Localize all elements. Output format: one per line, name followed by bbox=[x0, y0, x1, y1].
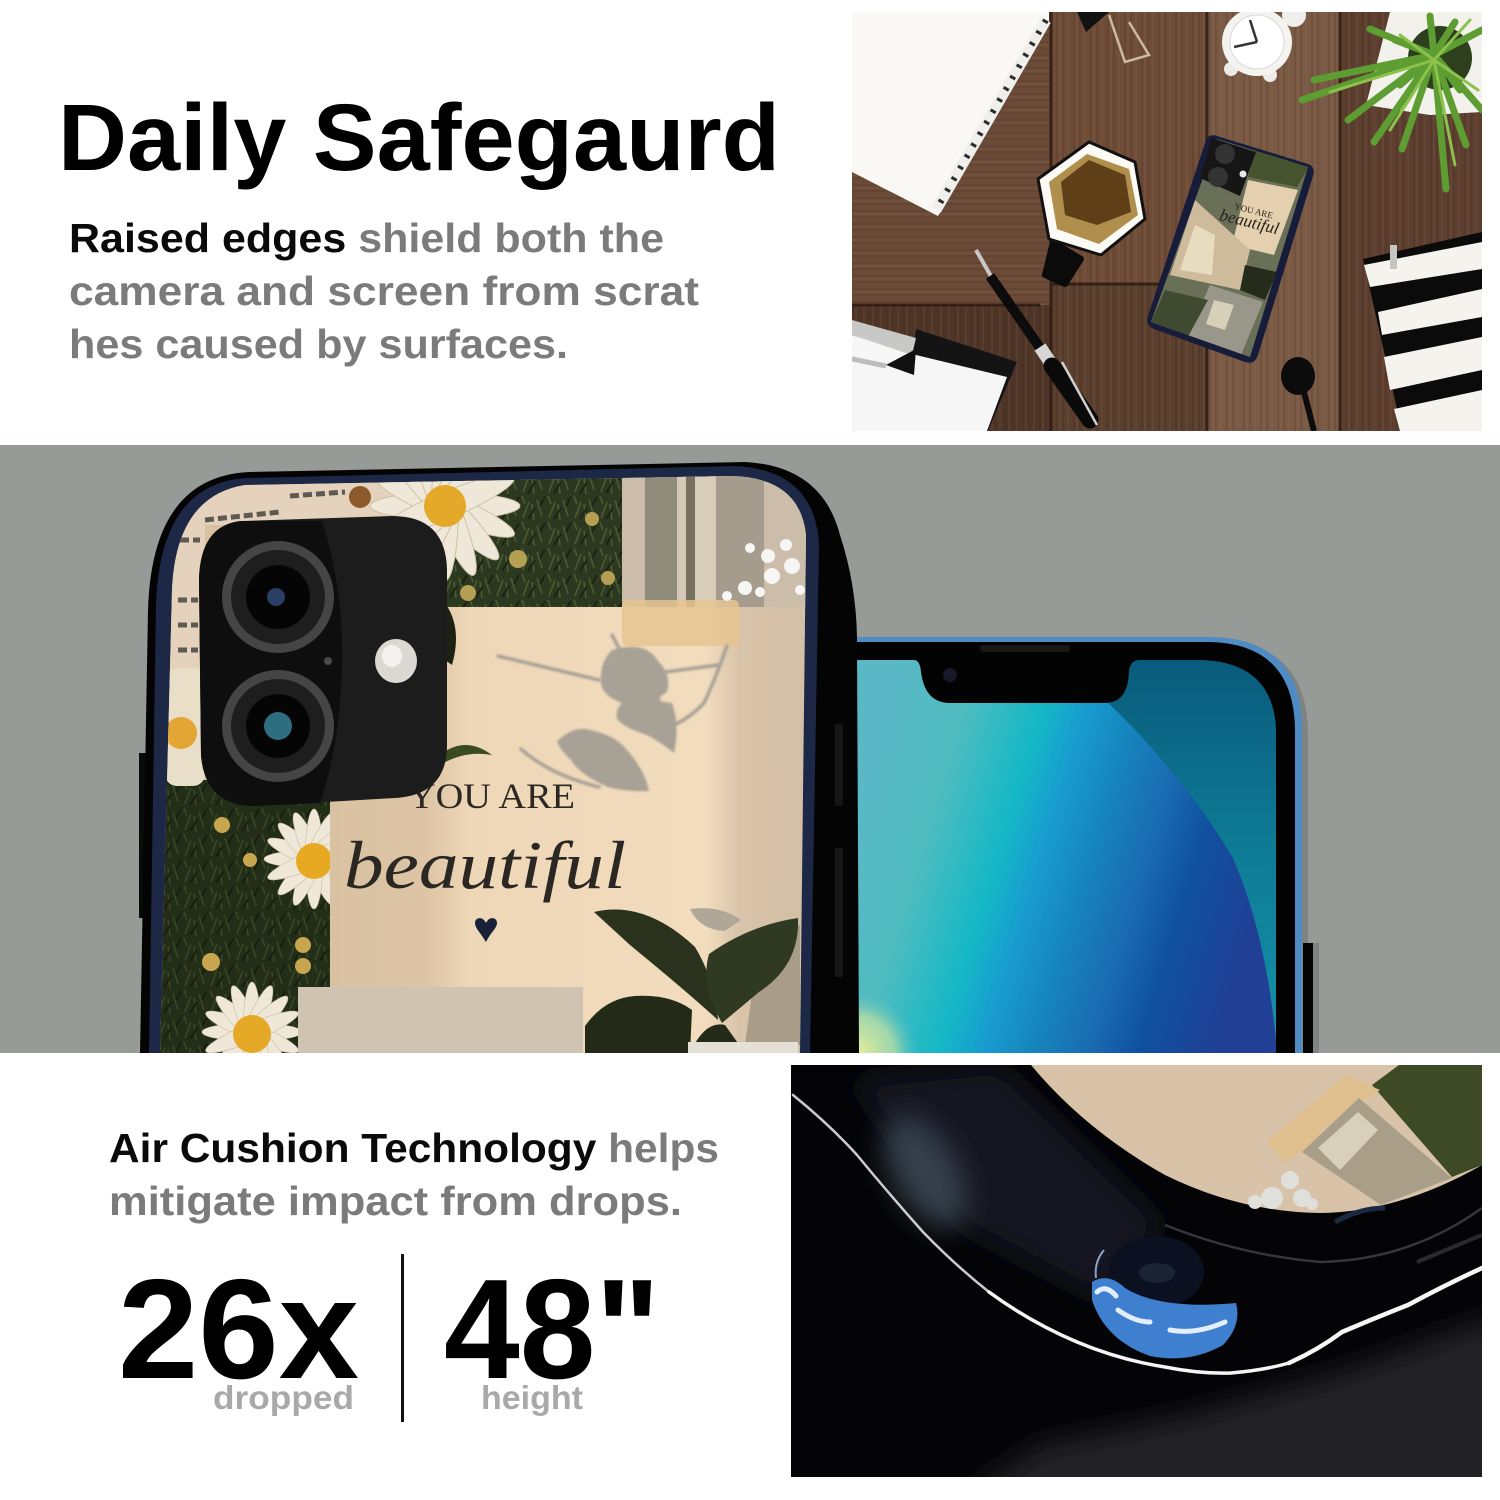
translucent tape bbox=[622, 600, 739, 646]
binder clip bbox=[1077, 12, 1149, 62]
left flowers and greenery bbox=[150, 780, 330, 1060]
text block: raised edges description bbox=[69, 215, 699, 367]
text block: air cushion description: Air Cushion Technology helps bbox=[109, 1125, 719, 1171]
mini phone artwork text: YOU ARE bbox=[1233, 201, 1274, 221]
photo: air cushion corner close-up bbox=[791, 1065, 1500, 1500]
camera module bbox=[199, 516, 447, 806]
gray band with phones bbox=[0, 431, 1500, 1082]
text block: raised edges description: hes caused by surfaces. bbox=[69, 321, 568, 367]
front camera bbox=[943, 668, 957, 682]
bottom daisy bbox=[202, 982, 298, 1053]
plant leaves bbox=[585, 908, 800, 1053]
lower lens bbox=[222, 670, 334, 782]
white edge line bbox=[793, 1095, 1482, 1373]
left daisy bbox=[165, 668, 205, 786]
small newspaper flower bbox=[349, 486, 371, 508]
earphone bbox=[1281, 357, 1315, 431]
stat: 26x dropped: dropped bbox=[213, 1379, 354, 1416]
mini phone bbox=[1140, 130, 1320, 365]
phone: front view with blue frame bbox=[840, 637, 1319, 1055]
mic bbox=[324, 657, 332, 665]
text block: air cushion description: mitigate impact from drops. bbox=[109, 1178, 682, 1224]
air cushion droplet bbox=[1092, 1236, 1237, 1358]
glassy bumper band bbox=[850, 1065, 1165, 1300]
upper lens bbox=[222, 541, 334, 653]
text block: raised edges description: camera and screen from scrat bbox=[69, 268, 699, 314]
side buttons bbox=[835, 724, 843, 977]
coffee cup bbox=[1038, 142, 1145, 284]
clipboard bbox=[852, 320, 1017, 431]
notepad bbox=[852, 12, 1049, 216]
newspaper strip bbox=[165, 480, 430, 670]
text block: air cushion description bbox=[109, 1125, 719, 1224]
speaker bbox=[980, 645, 1070, 652]
divider bbox=[401, 1254, 404, 1422]
flash bbox=[375, 639, 417, 683]
striped tape photo bbox=[622, 476, 808, 607]
phone: back view with floral case bbox=[139, 431, 859, 1082]
pen bbox=[976, 250, 1097, 425]
stat: 26x dropped: 26x bbox=[118, 1250, 359, 1409]
artwork text: YOU ARE bbox=[408, 776, 575, 816]
white flowers bbox=[722, 539, 805, 601]
artwork text bbox=[344, 776, 626, 903]
plant in pot bbox=[1302, 12, 1482, 189]
large daisy bbox=[370, 480, 520, 581]
stat: 48 inches height: 48" bbox=[444, 1250, 660, 1409]
striped notebook bbox=[1363, 232, 1482, 431]
note paper bbox=[298, 987, 583, 1055]
text block: raised edges description: Raised edges shield both the bbox=[69, 215, 664, 261]
clock bbox=[1222, 12, 1306, 82]
middle daisy bbox=[264, 808, 330, 910]
small leaves by camera bbox=[447, 606, 456, 665]
top floral photo bbox=[395, 478, 623, 607]
photo: phone on wooden desk bbox=[852, 3, 1482, 431]
lower dark surface bbox=[960, 1315, 1500, 1500]
bumper lines bbox=[1165, 1208, 1482, 1262]
mini phone artwork text: beautiful bbox=[1218, 205, 1281, 238]
heart bbox=[475, 918, 497, 942]
stat: 48 inches height: height bbox=[481, 1379, 583, 1416]
title: Daily Safegaurd bbox=[58, 85, 780, 191]
case artwork bbox=[1031, 1065, 1482, 1213]
glassy bumper reflection bbox=[866, 1102, 984, 1242]
leaf shadow bbox=[498, 635, 727, 791]
artwork text: beautiful bbox=[344, 827, 626, 903]
